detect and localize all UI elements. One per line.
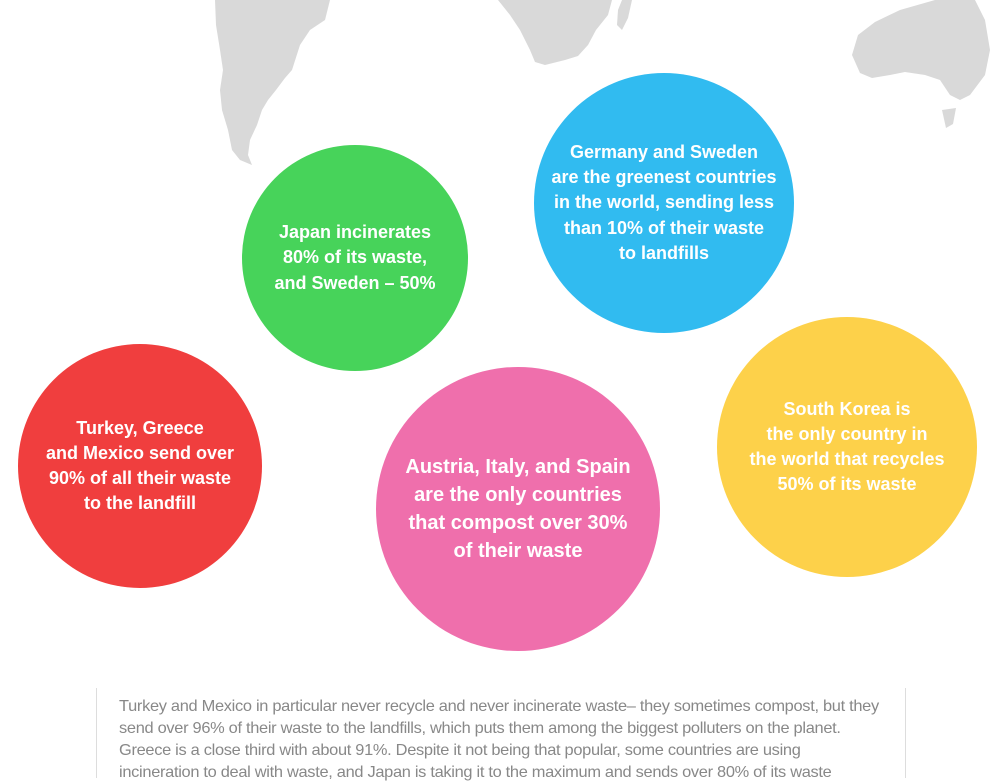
circle: south korea (yellow): the only country in <box>766 424 928 444</box>
circle: turkey greece mexico (red): and Mexico send over <box>46 443 234 463</box>
circle: turkey greece mexico (red): to the landfill <box>84 493 196 513</box>
circle: south korea (yellow): 50% of its waste <box>777 474 917 494</box>
circle: austria italy spain (pink): that compost over 30% <box>409 512 627 534</box>
circle: austria italy spain (pink): are the only countries <box>414 484 622 506</box>
world map background <box>215 0 990 165</box>
circle: germany and sweden (blue): than 10% of their waste <box>564 218 764 238</box>
circle: germany and sweden (blue): Germany and Sweden <box>570 142 758 162</box>
circle: japan (green): Japan incinerates <box>279 222 431 242</box>
circle: japan (green): and Sweden – 50% <box>274 273 436 293</box>
circle: austria italy spain (pink): Austria, Italy, and Spain <box>405 456 631 478</box>
text block: description: Turkey and Mexico in particular never recycle and never incinerate waste– they sometimes compost, but they <box>119 698 879 715</box>
text block: description: Greece is a close third with about 91%. Despite it not being that popular, some countries are using <box>119 742 801 759</box>
circle: japan (green): 80% of its waste, <box>283 247 427 267</box>
circle: germany and sweden (blue): in the world, sending less <box>554 192 774 212</box>
text block: description <box>96 688 906 778</box>
text block: description: incineration to deal with waste, and Japan is taking it to the maximum and sends over 80% of its waste <box>119 764 832 781</box>
circle: germany and sweden (blue): to landfills <box>619 243 709 263</box>
text block: description: send over 96% of their waste to the landfills, which puts them among the biggest polluters on the planet. <box>119 720 841 737</box>
circle: austria italy spain (pink) <box>376 367 660 651</box>
circle: germany and sweden (blue) <box>534 73 794 333</box>
circle: south korea (yellow) <box>717 317 977 577</box>
map: south america <box>215 0 330 165</box>
circle: turkey greece mexico (red): Turkey, Greece <box>76 418 204 438</box>
map: tasmania <box>942 108 956 128</box>
map: madagascar <box>617 0 632 30</box>
circle: turkey greece mexico (red): 90% of all their waste <box>49 468 231 488</box>
circle: austria italy spain (pink): of their waste <box>454 540 582 562</box>
circle: turkey greece mexico (red) <box>18 344 262 588</box>
circle: japan (green) <box>242 145 468 371</box>
circle: south korea (yellow): the world that recycles <box>749 449 945 469</box>
circle: germany and sweden (blue): are the greenest countries <box>551 167 777 187</box>
map: africa <box>498 0 612 65</box>
circle: south korea (yellow): South Korea is <box>783 399 910 419</box>
map: australia <box>852 0 990 100</box>
